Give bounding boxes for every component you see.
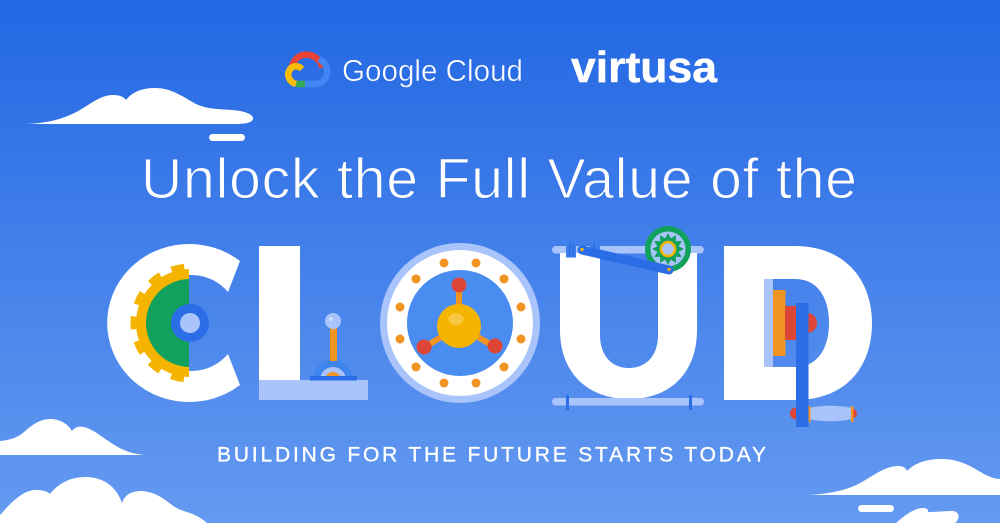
ring dots bbox=[396, 258, 526, 388]
wordmark: Google Cloud: Google Cloud bbox=[342, 53, 523, 88]
icon: three-arm hub bbox=[416, 278, 502, 354]
cloud: bottom left bbox=[0, 477, 207, 523]
letter U with crank bbox=[552, 226, 704, 410]
icon: crank arm bbox=[580, 248, 670, 271]
C shape bbox=[107, 244, 240, 402]
title: Unlock the Full Value of the bbox=[141, 147, 857, 211]
icon: press plates bbox=[764, 279, 817, 367]
cloud: bottom right bbox=[808, 459, 1000, 523]
letter D with press bbox=[724, 246, 872, 427]
logo: Virtusa: virtusa bbox=[571, 43, 718, 92]
tagline: BUILDING FOR THE FUTURE STARTS TODAY bbox=[217, 444, 766, 466]
L base bbox=[259, 380, 368, 400]
logo: Google Cloud bbox=[288, 53, 523, 88]
bottom rail bbox=[552, 395, 704, 410]
icon: Google Cloud mark bbox=[288, 55, 327, 84]
L stem bbox=[259, 246, 300, 380]
icon: piston clamp bbox=[566, 243, 600, 258]
letter O with hub bbox=[380, 243, 540, 403]
letter C with gear bbox=[107, 244, 246, 402]
D shape bbox=[724, 246, 872, 400]
O ring bbox=[380, 243, 540, 403]
icon: gear hub bbox=[171, 304, 209, 342]
cloud: middle left bbox=[0, 419, 146, 455]
icon: roller bbox=[790, 406, 857, 422]
letter L with lever bbox=[259, 246, 368, 400]
top rail bbox=[552, 246, 704, 254]
icon: lever bbox=[310, 313, 357, 380]
icon: vertical arm bbox=[796, 303, 808, 427]
icon: gear wheel bbox=[645, 226, 691, 272]
cloud: top left bbox=[27, 88, 253, 141]
icon: half gear bbox=[130, 264, 189, 382]
U shape bbox=[560, 253, 697, 399]
